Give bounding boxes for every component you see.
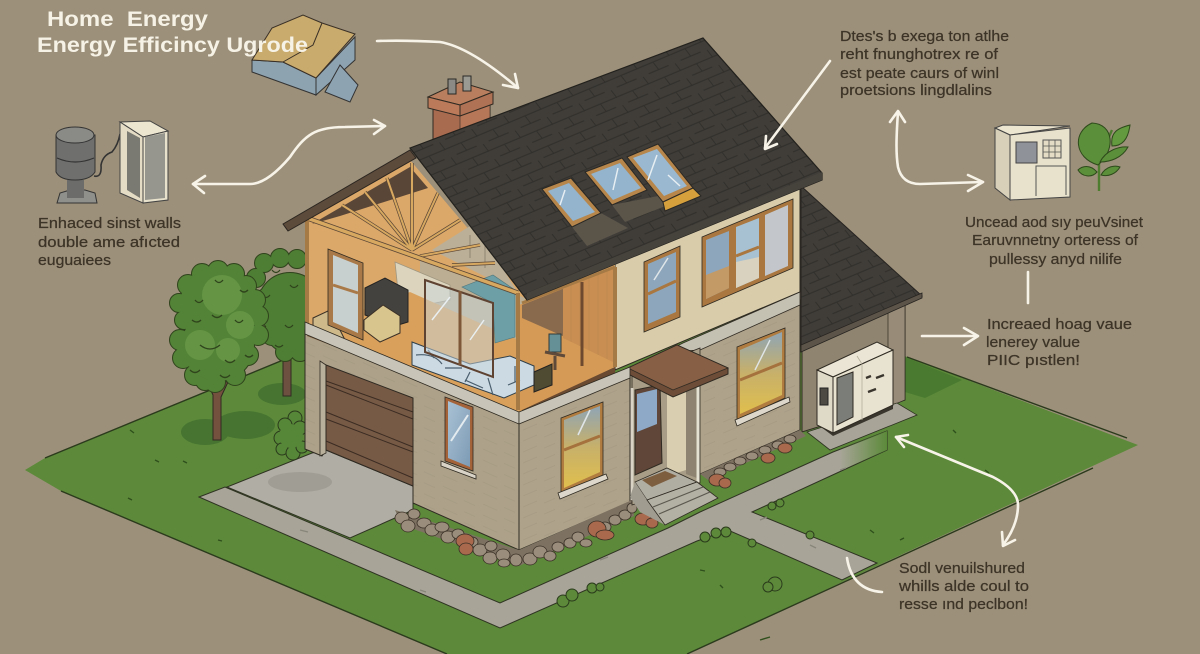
label: soil: Sodl venuilshured [899, 560, 1025, 577]
window upper triple [702, 199, 793, 307]
posts [307, 218, 615, 410]
label: value: PIIC pıstlen! [987, 352, 1080, 369]
front lower right wall [519, 372, 630, 550]
line: panel to value [1027, 272, 1029, 303]
window upper small [644, 246, 680, 332]
floor ledges [305, 322, 630, 424]
arrow: text to roof [765, 61, 830, 149]
shrub by garage [274, 411, 308, 460]
house [283, 38, 922, 567]
entry with door [630, 348, 718, 525]
label: left: Enhaced sinst walls [38, 215, 181, 232]
rafters [342, 163, 495, 265]
sidewalk [199, 431, 887, 628]
bushes along lawn [557, 499, 814, 607]
label: soil: resse ınd peclbon! [899, 596, 1028, 613]
icon: energy panel [995, 125, 1070, 200]
label: top right: Dtes's b exega ton atlhe [840, 28, 1009, 45]
insulation block [412, 342, 534, 398]
window lower right [735, 328, 790, 426]
driveway [227, 450, 413, 538]
icon: leaf plant [1078, 123, 1130, 191]
label: value: Increaed hoag vaue [987, 316, 1132, 333]
cabinet [120, 121, 168, 203]
storage boxes [313, 278, 408, 342]
tank [56, 127, 120, 203]
lower right wall [630, 300, 800, 505]
band ledge [665, 292, 800, 352]
side extension [801, 186, 922, 432]
cutaway window left [328, 249, 363, 340]
lawn [25, 300, 1138, 654]
label: left: double ame afıcted [38, 234, 180, 251]
shingle patches [572, 213, 628, 246]
cutaway window front [425, 280, 493, 377]
small furniture [534, 334, 565, 392]
window lower left [441, 397, 476, 479]
title [37, 8, 308, 57]
upper cream wall [615, 188, 800, 370]
window lower centre [558, 402, 608, 499]
label: mid right: Uncead aod sıy peuVsinet [965, 214, 1144, 231]
red rocks [456, 443, 792, 555]
porch roof [628, 345, 728, 397]
line: soil text [847, 558, 882, 592]
label: top right: proetsions lingdlalins [840, 82, 992, 99]
garage door [320, 361, 413, 486]
front lower left wall [305, 330, 519, 550]
tree front [170, 261, 268, 440]
arrow: title to roof [377, 41, 518, 88]
tree back [247, 249, 322, 396]
arrow: heating to chimney [193, 120, 385, 193]
arrow: text to panel [890, 111, 983, 191]
stone foundation [395, 430, 806, 567]
gable fascia [283, 150, 416, 231]
cutaway interior [307, 160, 615, 419]
label: left: euguaiees [38, 252, 111, 269]
skylights [542, 144, 701, 227]
label: top right: reht fnunghotrex re of [840, 46, 999, 63]
icon: water tank and air unit [56, 121, 168, 203]
label: top right [840, 28, 1009, 99]
teal tank [462, 275, 515, 343]
title: Energy Efficincy Ugrode [37, 34, 308, 57]
heat pump [807, 342, 917, 450]
arrow: to value text [922, 328, 978, 345]
label: top right: est peate caurs of winl [840, 65, 999, 82]
main roof [410, 38, 822, 300]
label: value [986, 316, 1132, 369]
label: mid right [965, 214, 1144, 268]
label: left [38, 215, 181, 269]
label: mid right: pullessy anyd nilife [989, 251, 1122, 268]
icon: insulation block [252, 15, 358, 102]
label: mid right: Earuvnnetny orteress of [972, 232, 1139, 249]
title: Home Energy [47, 8, 208, 31]
label: value: lenerey value [986, 334, 1080, 351]
chimney [428, 76, 493, 147]
truss beam [307, 218, 518, 293]
arrow: lawn to soil text [896, 435, 1018, 546]
label: soil: whills alde coul to [898, 578, 1029, 595]
label: soil [898, 560, 1029, 613]
